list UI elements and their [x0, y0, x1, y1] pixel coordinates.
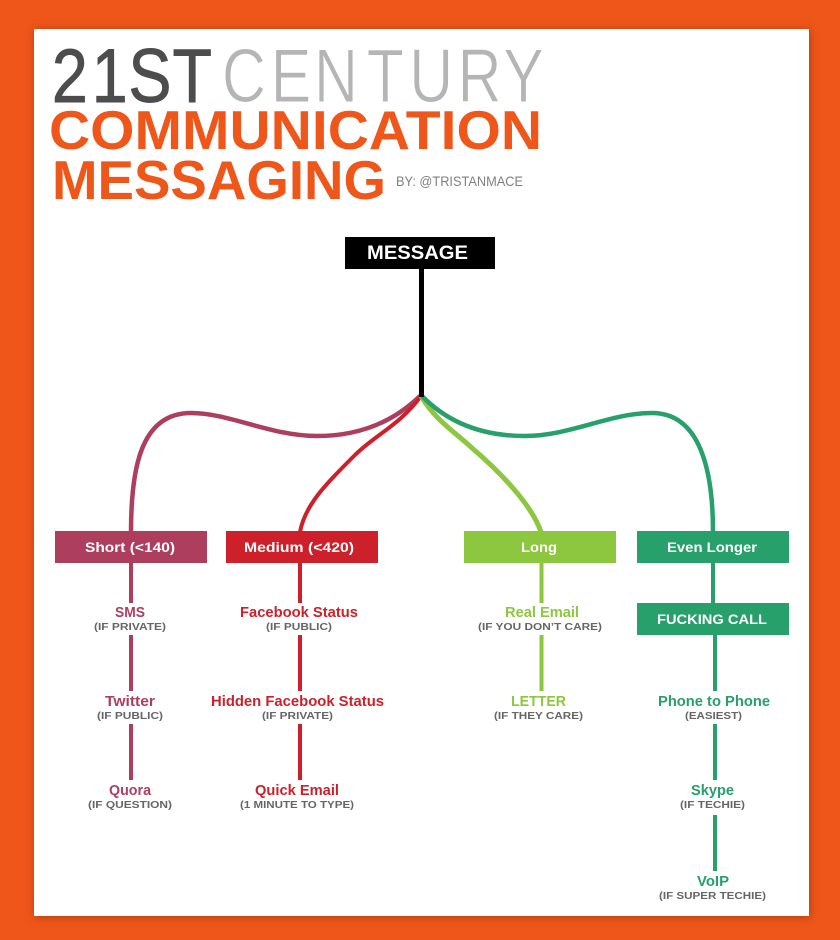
item: SMS: SMS [115, 605, 145, 621]
curve: medium branch [300, 396, 421, 532]
item: Letter: LETTER [511, 694, 567, 710]
box: long: Long [521, 539, 557, 555]
item: SMS: (IF PRIVATE) [94, 621, 166, 633]
title [49, 33, 544, 211]
box: fucking call [637, 603, 789, 635]
item: Real Email [478, 605, 602, 633]
item: Quora: (IF QUESTION) [88, 799, 172, 811]
column: even longer [637, 531, 789, 902]
item: SMS [94, 605, 166, 633]
item: Facebook Status: Facebook Status [240, 605, 358, 621]
item: Twitter [97, 694, 163, 722]
item: Twitter: (IF PUBLIC) [97, 710, 163, 722]
title line: messaging: MESSAGING [52, 149, 386, 211]
item: Phone to Phone [658, 694, 770, 722]
item: Hidden Facebook Status [211, 694, 384, 722]
item: Phone to Phone: (EASIEST) [685, 710, 742, 722]
message box: MESSAGE [367, 243, 468, 264]
box: even longer: Even Longer [667, 539, 758, 555]
byline: BY: @TRISTANMACE [396, 173, 523, 189]
box: fucking call: FUCKING CALL [657, 611, 767, 627]
title line: 21st century [52, 33, 544, 119]
item: Skype: (IF TECHIE) [680, 799, 745, 811]
connector lines [540, 563, 544, 691]
column: medium [211, 531, 384, 811]
item: Hidden Facebook Status: (IF PRIVATE) [262, 710, 333, 722]
box: short: Short (<140) [85, 539, 175, 555]
column: long [464, 531, 616, 722]
item: Quick Email: Quick Email [255, 783, 339, 799]
item: Phone to Phone: Phone to Phone [658, 694, 770, 710]
item: Twitter: Twitter [105, 694, 155, 710]
item: Real Email: (IF YOU DON’T CARE) [478, 621, 602, 633]
item: Real Email: Real Email [505, 605, 579, 621]
curve: short branch [131, 396, 420, 532]
connector lines [713, 563, 715, 871]
item: Hidden Facebook Status: Hidden Facebook Status [211, 694, 384, 710]
box: even longer [637, 531, 789, 563]
item: VoIP: VoIP [697, 874, 729, 890]
box: medium: Medium (<420) [244, 539, 354, 555]
item: Quick Email [240, 783, 354, 811]
item: Quora: Quora [109, 783, 152, 799]
item: Quora [88, 783, 172, 811]
stem line [419, 269, 424, 397]
item: Facebook Status: (IF PUBLIC) [266, 621, 332, 633]
item: VoIP: (IF SUPER TECHIE) [659, 890, 766, 902]
item: Letter [494, 694, 583, 722]
item: Facebook Status [240, 605, 358, 633]
item: VoIP [659, 874, 766, 902]
connector lines [298, 563, 302, 780]
title line: 21st century: 21ST [52, 33, 212, 118]
item: Quick Email: (1 MINUTE TO TYPE) [240, 799, 354, 811]
column: short [55, 531, 207, 811]
title line: communication: COMMUNICATION [49, 99, 542, 161]
box: long [464, 531, 616, 563]
box: medium [226, 531, 378, 563]
item: Letter: (IF THEY CARE) [494, 710, 583, 722]
curve: long branch [421, 396, 541, 532]
curve: even longer branch [422, 396, 713, 532]
item: Skype [680, 783, 745, 811]
box: short [55, 531, 207, 563]
message box [345, 237, 495, 269]
title line: 21st century: CENTURY [222, 34, 544, 119]
connector lines [129, 563, 133, 780]
item: Skype: Skype [691, 783, 734, 799]
